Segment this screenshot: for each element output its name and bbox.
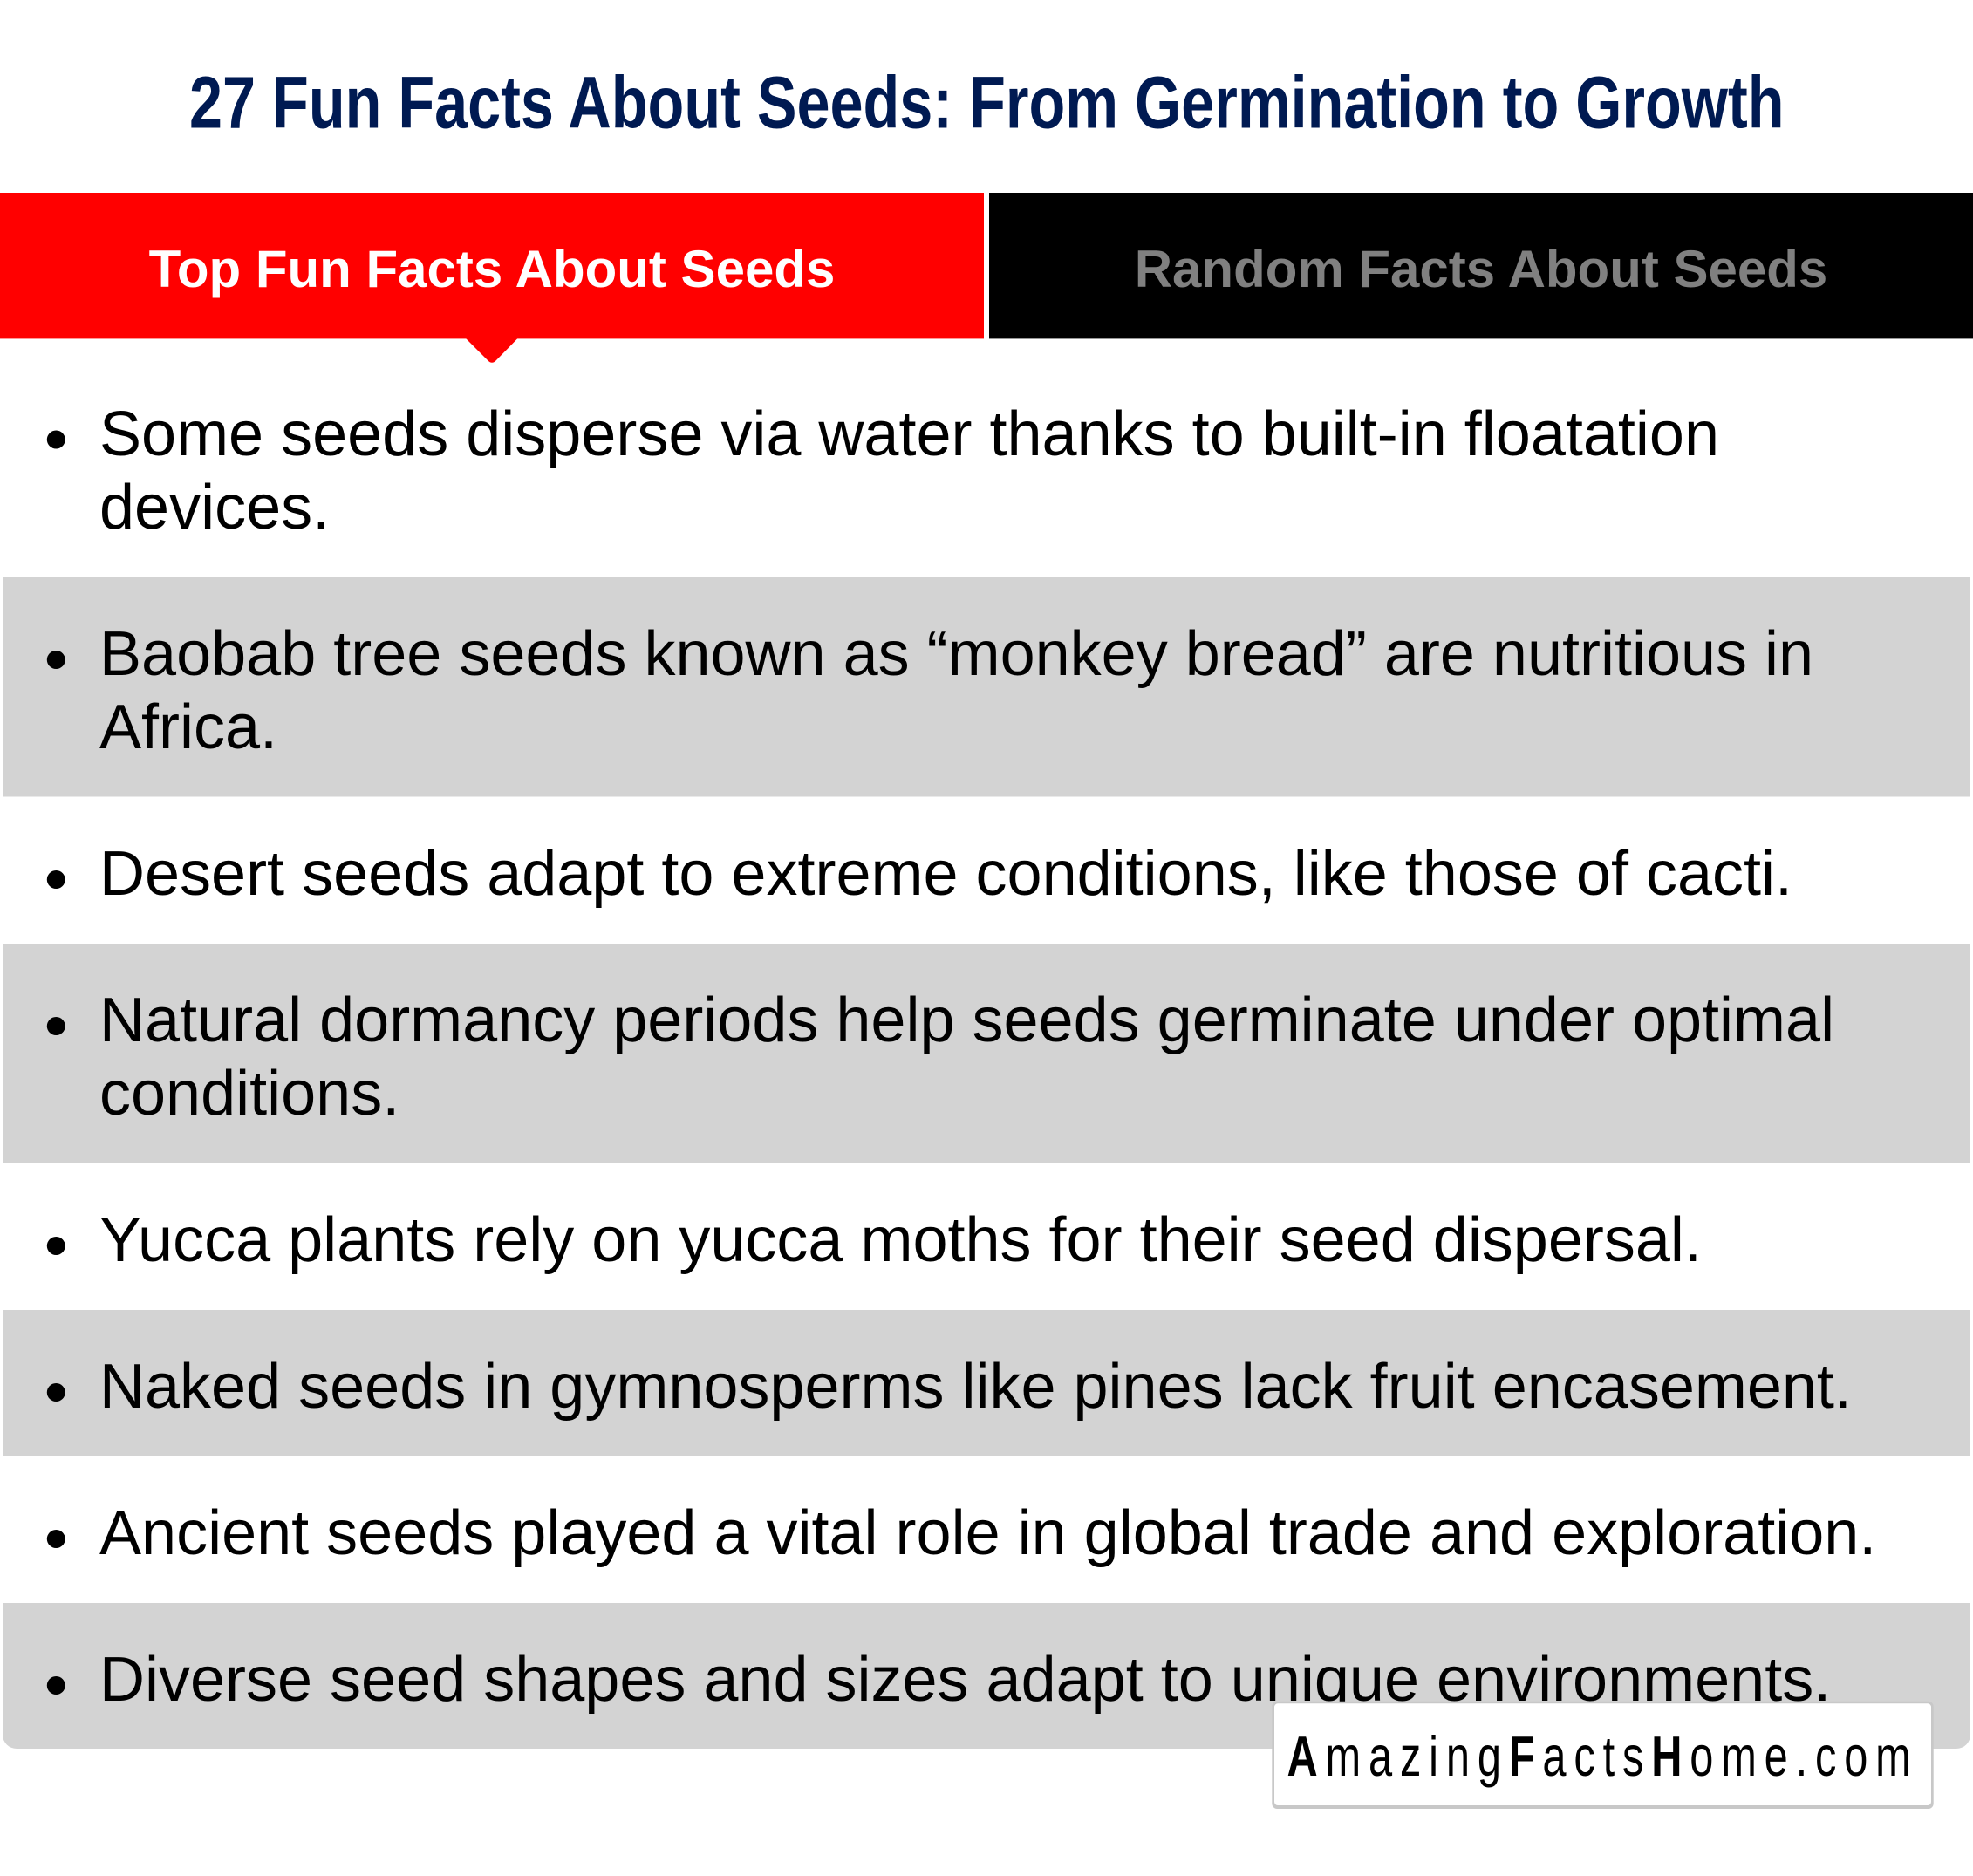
fact row 1: Some seeds disperse via water thanks to built-in floatation	[99, 399, 1719, 469]
tab: top fun facts (active): Top Fun Facts About Seeds	[149, 240, 835, 298]
fact row 4: Natural dormancy periods help seeds germinate under optimal	[99, 986, 1834, 1055]
fact row 2	[3, 577, 1970, 797]
fact row 4: conditions.	[99, 1059, 399, 1129]
fact row 2: Africa.	[99, 692, 277, 762]
fact row 2: Baobab tree seeds known as “monkey bread” are nutritious in	[99, 619, 1813, 689]
fact row 5	[3, 1163, 1970, 1310]
fact row 1: devices.	[99, 473, 330, 542]
fact row 7	[3, 1456, 1970, 1603]
fact row 6: Naked seeds in gymnosperms like pines lack fruit encasement.	[99, 1352, 1852, 1422]
tab: random facts (inactive)	[989, 193, 1973, 338]
panel: fact list	[3, 366, 1970, 1749]
fact row 8	[3, 1603, 1970, 1749]
tab: random facts (inactive): Random Facts About Seeds	[1135, 240, 1827, 298]
fact row 4	[3, 944, 1970, 1163]
tab bar	[0, 193, 1973, 363]
fact row 7: Ancient seeds played a vital role in global trade and exploration.	[99, 1498, 1876, 1568]
watermark badge: AmazingFactsHome.com	[1287, 1725, 1919, 1789]
fact row 3: Desert seeds adapt to extreme conditions, like those of cacti.	[99, 839, 1792, 909]
fact row 5: Yucca plants rely on yucca moths for their seed dispersal.	[99, 1205, 1702, 1275]
watermark badge	[1272, 1702, 1934, 1809]
fact row 1	[3, 366, 1970, 577]
fact row 6	[3, 1310, 1970, 1456]
fact row 8: Diverse seed shapes and sizes adapt to unique environments.	[99, 1645, 1831, 1715]
fact row 3	[3, 797, 1970, 944]
tab: top fun facts (active)	[0, 193, 984, 363]
